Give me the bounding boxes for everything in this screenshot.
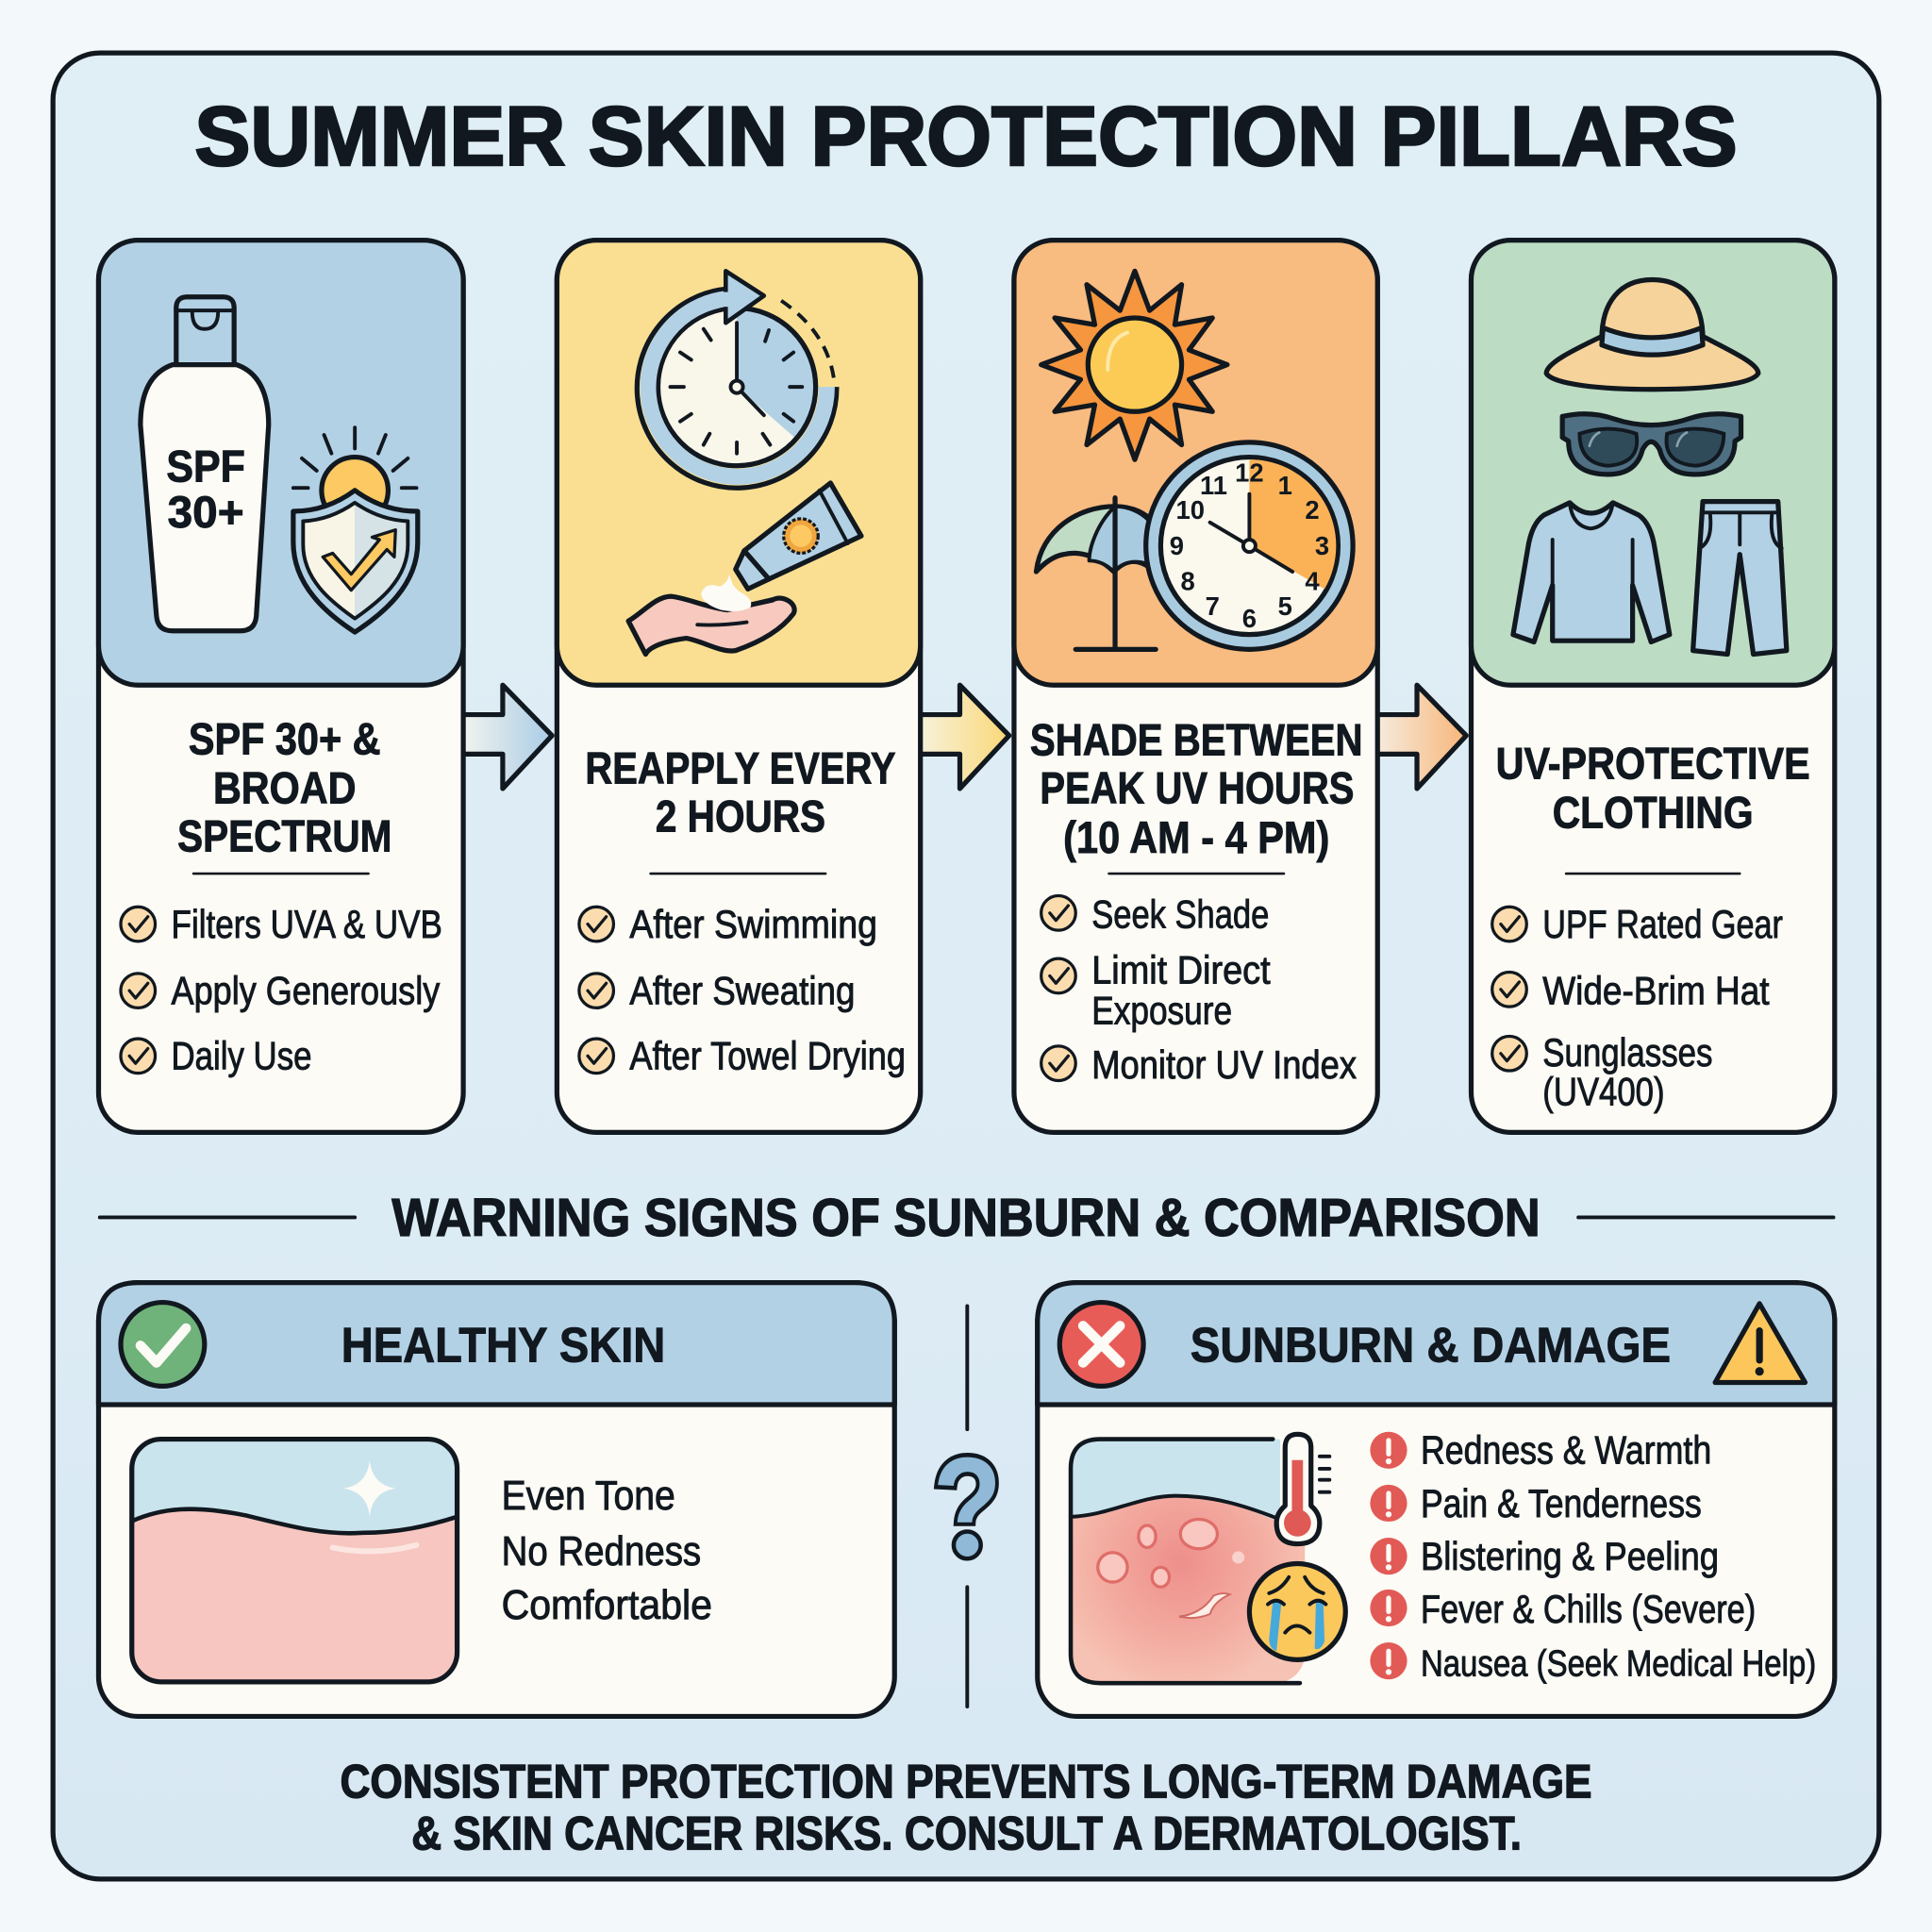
checklist: Monitor UV Index <box>1091 1042 1357 1087</box>
warning signs list: Fever & Chills (Severe) <box>1421 1587 1756 1631</box>
healthy skin traits: No Redness <box>502 1529 701 1574</box>
checklist: Filters UVA & UVB <box>172 902 442 946</box>
checklist: Limit Direct <box>1091 947 1271 991</box>
checklist: Exposure <box>1091 988 1232 1032</box>
heading: SPF 30+ & <box>189 713 381 763</box>
heading <box>1030 715 1363 862</box>
heading: (10 AM - 4 PM) <box>1063 812 1329 862</box>
heading: SPECTRUM <box>177 811 391 861</box>
icon: trousers <box>1693 502 1787 655</box>
icon: peak hours clock: 12 <box>1235 458 1264 488</box>
icon: peak hours clock: 8 <box>1180 567 1195 596</box>
heading: SHADE BETWEEN <box>1030 715 1363 765</box>
icon: sunscreen tube on hand <box>628 483 861 655</box>
heading: REAPPLY EVERY <box>585 743 896 793</box>
comparison divider with question mark <box>933 1306 1002 1707</box>
checklist <box>1041 892 1357 1087</box>
icon: long-sleeve shirt <box>1513 503 1670 641</box>
icon: peak hours clock: 9 <box>1170 531 1184 560</box>
warning signs list: Blistering & Peeling <box>1421 1534 1719 1578</box>
icon: warning triangle <box>1715 1304 1805 1382</box>
checklist: Wide-Brim Hat <box>1542 968 1770 1012</box>
warning signs list <box>1370 1428 1816 1684</box>
checklist: UPF Rated Gear <box>1542 902 1783 946</box>
icon: peak hours clock: 3 <box>1315 531 1329 560</box>
checklist: After Towel Drying <box>629 1034 906 1078</box>
icon: sunscreen bottle <box>141 297 269 631</box>
heading: BROAD <box>213 763 356 813</box>
heading: SUNBURN & DAMAGE <box>1191 1318 1671 1373</box>
icon: peak hours clock: 11 <box>1200 471 1227 500</box>
panel: shade between peak UV hours <box>1014 241 1377 1132</box>
icon: sunglasses <box>1562 414 1741 475</box>
checklist <box>579 902 906 1078</box>
healthy skin traits: Even Tone <box>502 1474 675 1519</box>
warning signs list: Pain & Tenderness <box>1421 1481 1702 1525</box>
footer message: CONSISTENT PROTECTION PREVENTS LONG-TERM DAMAGE <box>340 1756 1592 1808</box>
arrow: step 3 to 4 <box>1375 685 1466 789</box>
healthy skin traits: Comfortable <box>502 1583 712 1628</box>
icon: peak hours clock: 2 <box>1305 495 1320 525</box>
icon: peak hours clock: 7 <box>1206 591 1220 621</box>
title: SUMMER SKIN PROTECTION PILLARS <box>194 90 1738 183</box>
checklist: After Sweating <box>629 968 855 1012</box>
footer message: & SKIN CANCER RISKS. CONSULT A DERMATOLOGIST. <box>411 1807 1522 1859</box>
panel: SPF 30+ and broad spectrum <box>98 241 463 1132</box>
icon: peak hours clock: 1 <box>1278 471 1292 500</box>
icon: sunscreen bottle: SPF <box>166 441 245 491</box>
checklist <box>1492 902 1783 1114</box>
sunburned skin illustration <box>1059 1440 1306 1700</box>
icon: clock with arrow <box>637 271 837 488</box>
heading <box>1496 738 1810 838</box>
heading: CLOTHING <box>1553 788 1754 838</box>
icon: umbrella <box>1036 498 1156 649</box>
icon: peak hours clock: 5 <box>1278 591 1292 621</box>
healthy skin traits <box>502 1474 712 1628</box>
arrow: step 1 to 2 <box>460 685 552 789</box>
icon: green check <box>121 1303 205 1386</box>
checklist: Apply Generously <box>172 968 440 1012</box>
icon: sun hat <box>1546 279 1758 390</box>
heading <box>177 713 391 861</box>
checklist: Daily Use <box>172 1034 311 1078</box>
arrow: step 2 to 3 <box>918 685 1009 789</box>
checklist: Seek Shade <box>1091 892 1269 937</box>
panel: sunburn and damage <box>1038 1283 1835 1716</box>
comparison divider with question mark: ? <box>933 1429 1002 1578</box>
icon: peak hours clock <box>1146 442 1353 649</box>
icon: peak hours clock: 6 <box>1242 604 1257 633</box>
icon: sun <box>1041 271 1227 459</box>
panel: reapply every 2 hours <box>557 241 921 1132</box>
icon: peak hours clock: 10 <box>1175 495 1205 525</box>
icon: crying face <box>1249 1563 1345 1659</box>
healthy skin illustration <box>124 1440 468 1700</box>
checklist: Sunglasses <box>1542 1030 1713 1074</box>
heading: 2 HOURS <box>656 791 825 841</box>
icon: sunscreen bottle: 30+ <box>168 487 244 537</box>
heading <box>585 743 896 841</box>
warning signs list: Redness & Warmth <box>1421 1428 1711 1473</box>
section heading: WARNING SIGNS OF SUNBURN & COMPARISON <box>391 1188 1541 1247</box>
heading: PEAK UV HOURS <box>1040 763 1354 813</box>
checklist: (UV400) <box>1542 1070 1665 1114</box>
icon: red cross <box>1059 1303 1143 1386</box>
footer message <box>340 1756 1592 1859</box>
panel: healthy skin <box>98 1283 894 1716</box>
checklist: After Swimming <box>629 902 877 946</box>
heading: UV-PROTECTIVE <box>1496 738 1810 788</box>
heading: HEALTHY SKIN <box>341 1318 665 1373</box>
checklist <box>121 902 442 1078</box>
icon: peak hours clock: 4 <box>1305 567 1320 596</box>
panel: UV-protective clothing <box>1472 241 1835 1132</box>
warning signs list: Nausea (Seek Medical Help) <box>1421 1643 1816 1684</box>
icon: sun and shield <box>293 427 418 632</box>
icon: thermometer <box>1276 1434 1329 1544</box>
